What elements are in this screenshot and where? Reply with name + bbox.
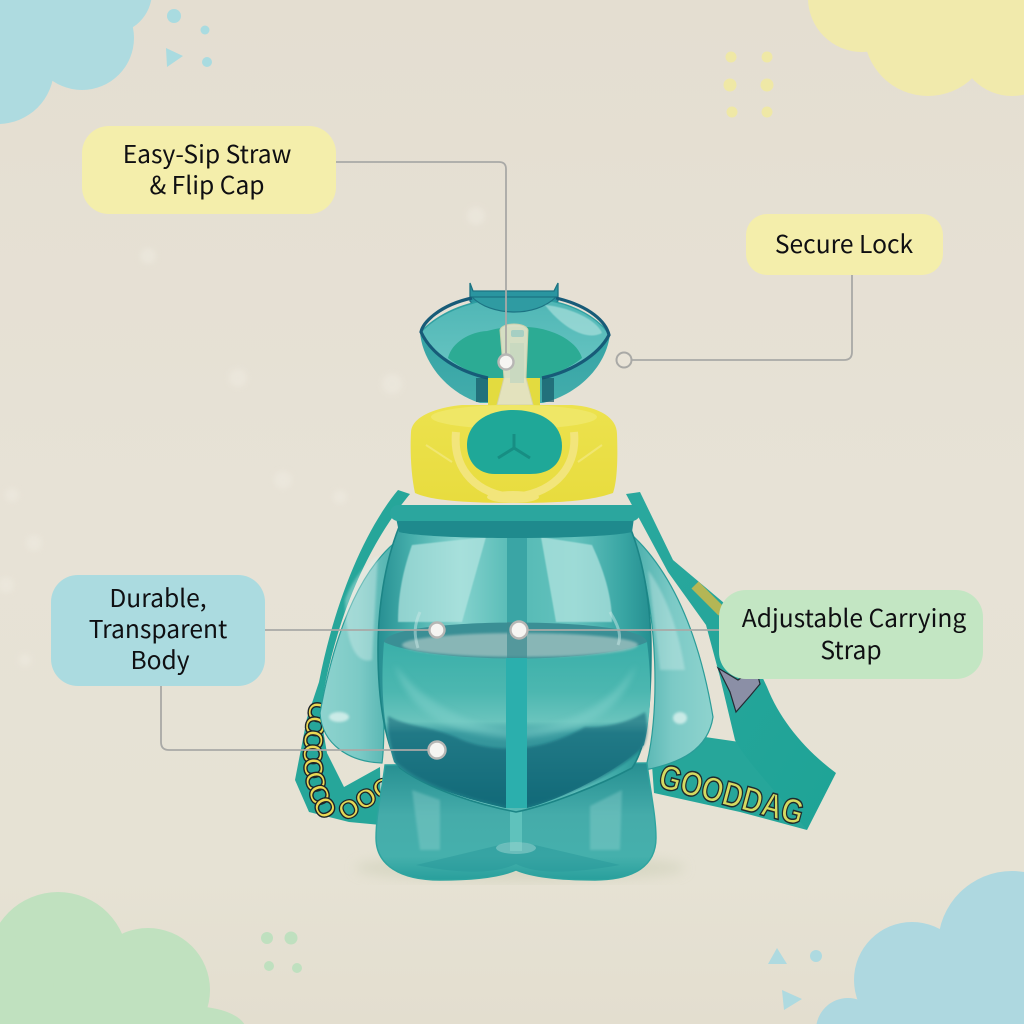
clear straw (497, 324, 533, 405)
callout: secure lock (746, 214, 943, 275)
lid inner (422, 298, 608, 378)
cloud: bottom right (816, 871, 1024, 1024)
leader: straw (336, 162, 506, 362)
teal button (467, 410, 562, 474)
decorative dots: top left (166, 9, 212, 67)
yellow cap (411, 405, 617, 503)
callout: durable body: Durable, (109, 579, 207, 615)
hinge tab front (472, 297, 556, 312)
marker: strap (510, 622, 528, 638)
callout: durable body: Transparent (89, 610, 227, 646)
water bottle (295, 282, 836, 881)
lid shine (545, 305, 602, 335)
leader: lock (632, 275, 852, 360)
dark reflection (388, 712, 647, 806)
water surface (384, 622, 647, 658)
marker: lock (616, 352, 632, 368)
water bowl glow (395, 665, 636, 738)
right arm (632, 535, 713, 770)
leader: strap (519, 629, 719, 631)
leader: body (265, 629, 437, 631)
lid (420, 283, 610, 403)
cloud: bottom left (0, 892, 246, 1024)
callout: easy-sip straw: Easy-Sip Straw (123, 135, 292, 171)
marker: body lower (428, 742, 446, 758)
hinge shadows (476, 378, 554, 402)
bottle base (376, 763, 656, 880)
cloud: top right (808, 0, 1024, 96)
lid bowl outer (420, 297, 610, 403)
soft bokeh spots (0, 207, 485, 666)
straw (506, 537, 527, 808)
main transparent body (378, 527, 651, 812)
strap lettering: left: OOOOOOOO (302, 702, 336, 818)
yellow straw base (488, 378, 540, 414)
button icon (498, 434, 530, 458)
callout: carrying strap: Adjustable Carrying (742, 599, 966, 635)
callout: durable body (51, 575, 265, 686)
callout: easy-sip straw: & Flip Cap (149, 166, 265, 202)
callout: carrying strap (719, 590, 983, 679)
strap: left (295, 490, 410, 827)
decorative dots: top right (724, 52, 774, 118)
marker: body upper (430, 622, 444, 638)
callout: secure lock: Secure Lock (775, 225, 914, 261)
decorative dots: bottom right (768, 948, 822, 1010)
lid rim (421, 298, 609, 378)
callout: durable body: Body (130, 641, 190, 677)
cap top disc (431, 405, 597, 429)
latch tab (487, 491, 539, 503)
water (382, 642, 650, 808)
floor shadow (355, 854, 685, 882)
strap lettering: lower left: OOO (332, 769, 400, 827)
arm glints (329, 555, 687, 724)
neck (396, 518, 634, 538)
callout: carrying strap: Strap (820, 631, 882, 667)
decorative dots: bottom left (261, 932, 302, 973)
lid hinge tab (470, 283, 558, 316)
neck ring (390, 505, 640, 521)
water surface ripple (415, 612, 620, 648)
water surface shine (402, 633, 638, 657)
strap: right (626, 492, 836, 833)
callout: easy-sip straw (82, 126, 336, 214)
strap star (718, 668, 760, 712)
lid interior floor (448, 327, 582, 378)
body highlights (398, 537, 612, 622)
strap lettering: GOODDAG (655, 757, 808, 833)
left arm (320, 540, 398, 763)
marker: straw (498, 354, 514, 370)
cap latch ring (456, 432, 574, 497)
cap crease (426, 445, 602, 462)
base inner detail (412, 790, 622, 872)
leader: body lower (161, 686, 437, 750)
cloud: top left (0, 0, 152, 124)
